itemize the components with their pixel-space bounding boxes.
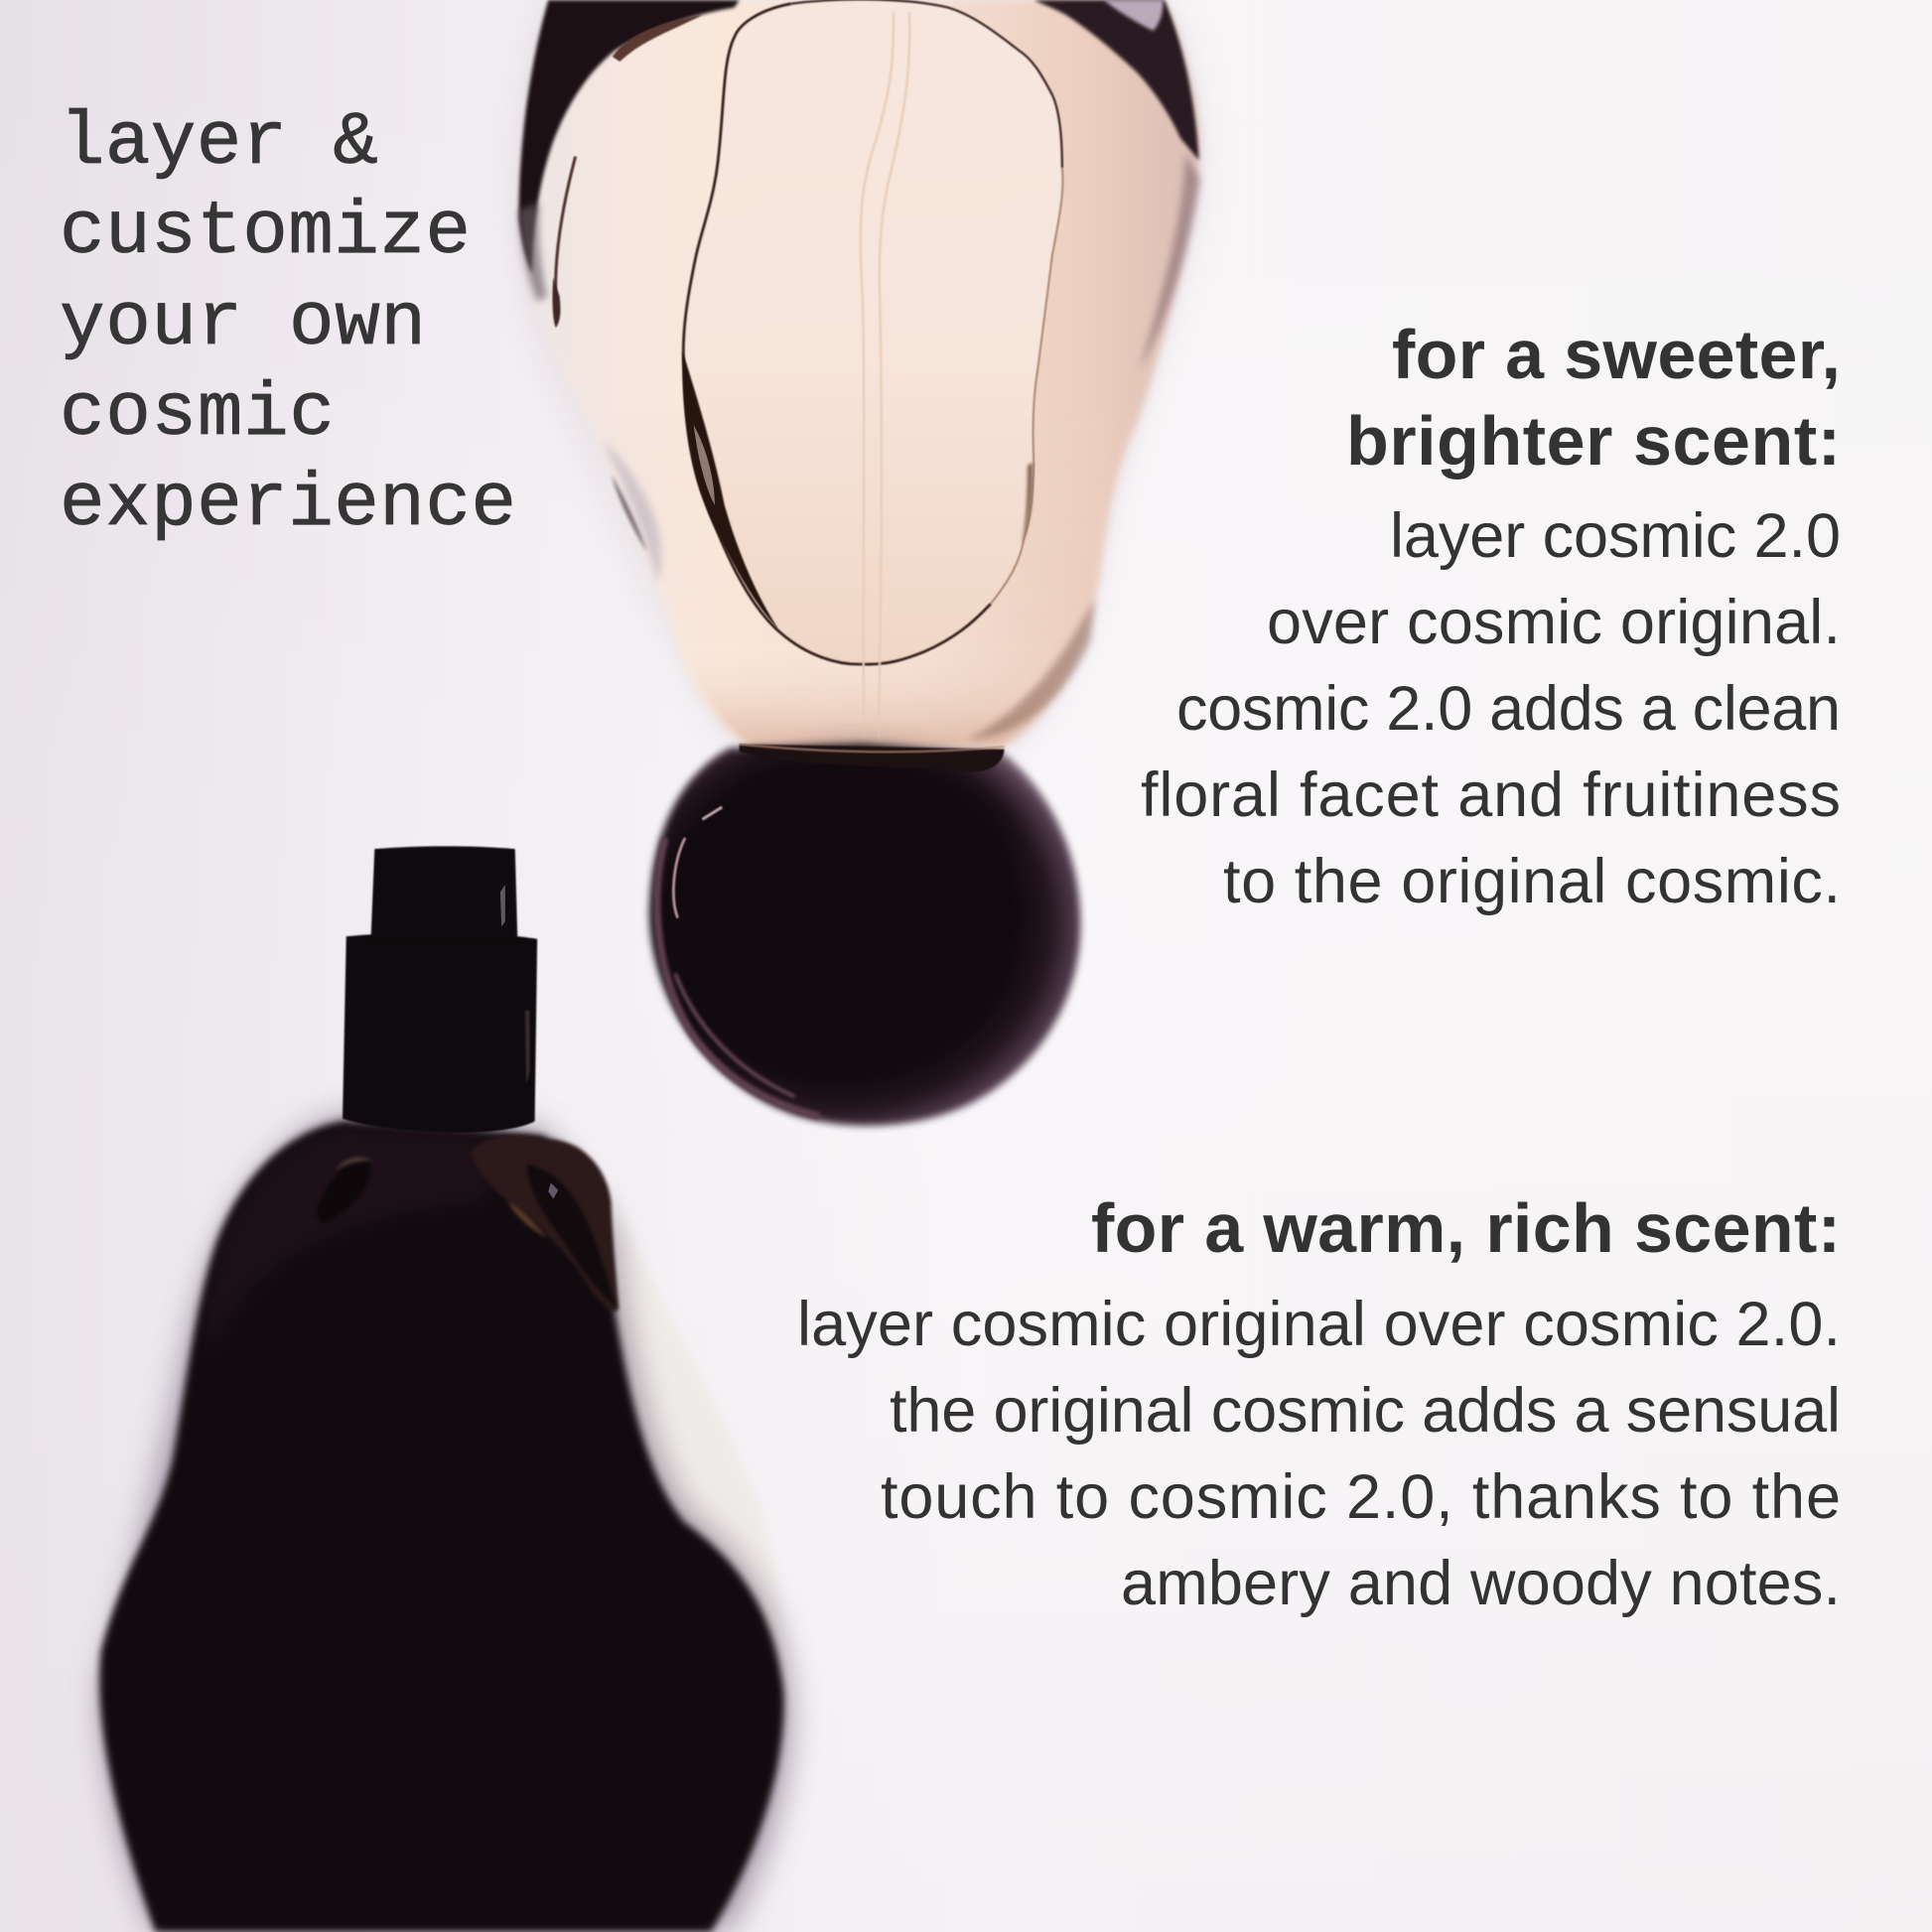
shoulder drop, sparkle <box>548 1182 558 1199</box>
body copy: sweeter, brighter <box>1141 501 1841 916</box>
shoulder glass drop, left <box>316 1157 370 1223</box>
bottle bottom tint <box>604 419 1115 750</box>
bottle body <box>99 1121 784 1932</box>
grey fade under dark band <box>519 204 547 302</box>
dark glass band, top left <box>519 0 740 274</box>
heading: cosmic <box>60 371 335 457</box>
text block: sweeter, brighter scent <box>1141 316 1841 916</box>
dark crescent, left of chamber <box>682 351 778 629</box>
body copy: warm, rich: the original cosmic adds a sensual <box>890 1376 1841 1446</box>
body copy: warm, rich: layer cosmic original over cosmic 2.0. <box>797 1290 1841 1359</box>
subheading: warm, rich: for a warm, rich scent: <box>1091 1189 1841 1267</box>
warm reflection, lower right <box>967 598 1095 740</box>
bottle soft halo <box>519 0 1199 755</box>
heading: layer & <box>60 100 378 186</box>
ball cap <box>649 745 1080 1126</box>
photo: pink perfume bottle with dark ball cap <box>519 0 1200 1126</box>
body copy: sweeter, brighter: cosmic 2.0 adds a clean <box>1176 674 1841 744</box>
photo: dark perfume bottle <box>99 846 789 1932</box>
collar glint <box>525 1011 530 1084</box>
shoulder drop, dark core <box>527 1165 617 1307</box>
cap glint <box>500 885 505 926</box>
subheading: sweeter, brighter <box>1346 316 1841 480</box>
ball top shadow <box>702 758 1011 942</box>
body copy: sweeter, brighter: floral facet and fruitiness <box>1141 760 1841 830</box>
heading: customize <box>60 190 471 275</box>
body copy: sweeter, brighter: layer cosmic 2.0 <box>1390 501 1841 571</box>
bottle shoulder tint <box>207 1128 517 1355</box>
heading: your own <box>60 281 426 366</box>
pump cap <box>371 846 517 939</box>
text block: warm, rich scent <box>797 1189 1841 1618</box>
subheading: sweeter, brighter: brighter scent: <box>1346 402 1841 480</box>
shoulder glass drop, right <box>471 1135 619 1311</box>
body copy: warm, rich: ambery and woody notes. <box>1121 1549 1841 1618</box>
shoulder drop, amber glint <box>507 1201 548 1238</box>
ball left rim <box>657 838 819 1116</box>
soft purple edge, right <box>1140 154 1200 369</box>
dark thick line, lower right of chamber <box>1022 462 1033 545</box>
body copy: warm, rich: touch to cosmic 2.0, thanks to the <box>881 1462 1841 1532</box>
pale lilac fade, lower left edge <box>522 308 675 640</box>
ball neck band <box>740 745 1004 771</box>
heading <box>60 100 516 547</box>
dark glass band, top right <box>1034 0 1199 160</box>
bottle glass body <box>519 0 1199 750</box>
lilac reflection, top right <box>1104 0 1164 31</box>
bottle halo <box>101 1115 789 1932</box>
lilac reflection, lower left <box>602 438 661 583</box>
heading: experience <box>60 462 516 547</box>
amber streak, top left <box>613 15 702 62</box>
inner juice chamber <box>682 0 1062 664</box>
ball highlights <box>673 838 685 918</box>
body copy: warm, rich <box>797 1290 1841 1618</box>
pump collar <box>343 933 537 1133</box>
body copy: sweeter, brighter: to the original cosmic. <box>1223 847 1841 916</box>
thin refraction, left <box>556 157 576 296</box>
clear glass edge, right <box>613 1189 785 1725</box>
dip tube <box>861 12 909 740</box>
subheading: sweeter, brighter: for a sweeter, <box>1392 316 1841 393</box>
body copy: sweeter, brighter: over cosmic original. <box>1267 588 1841 657</box>
